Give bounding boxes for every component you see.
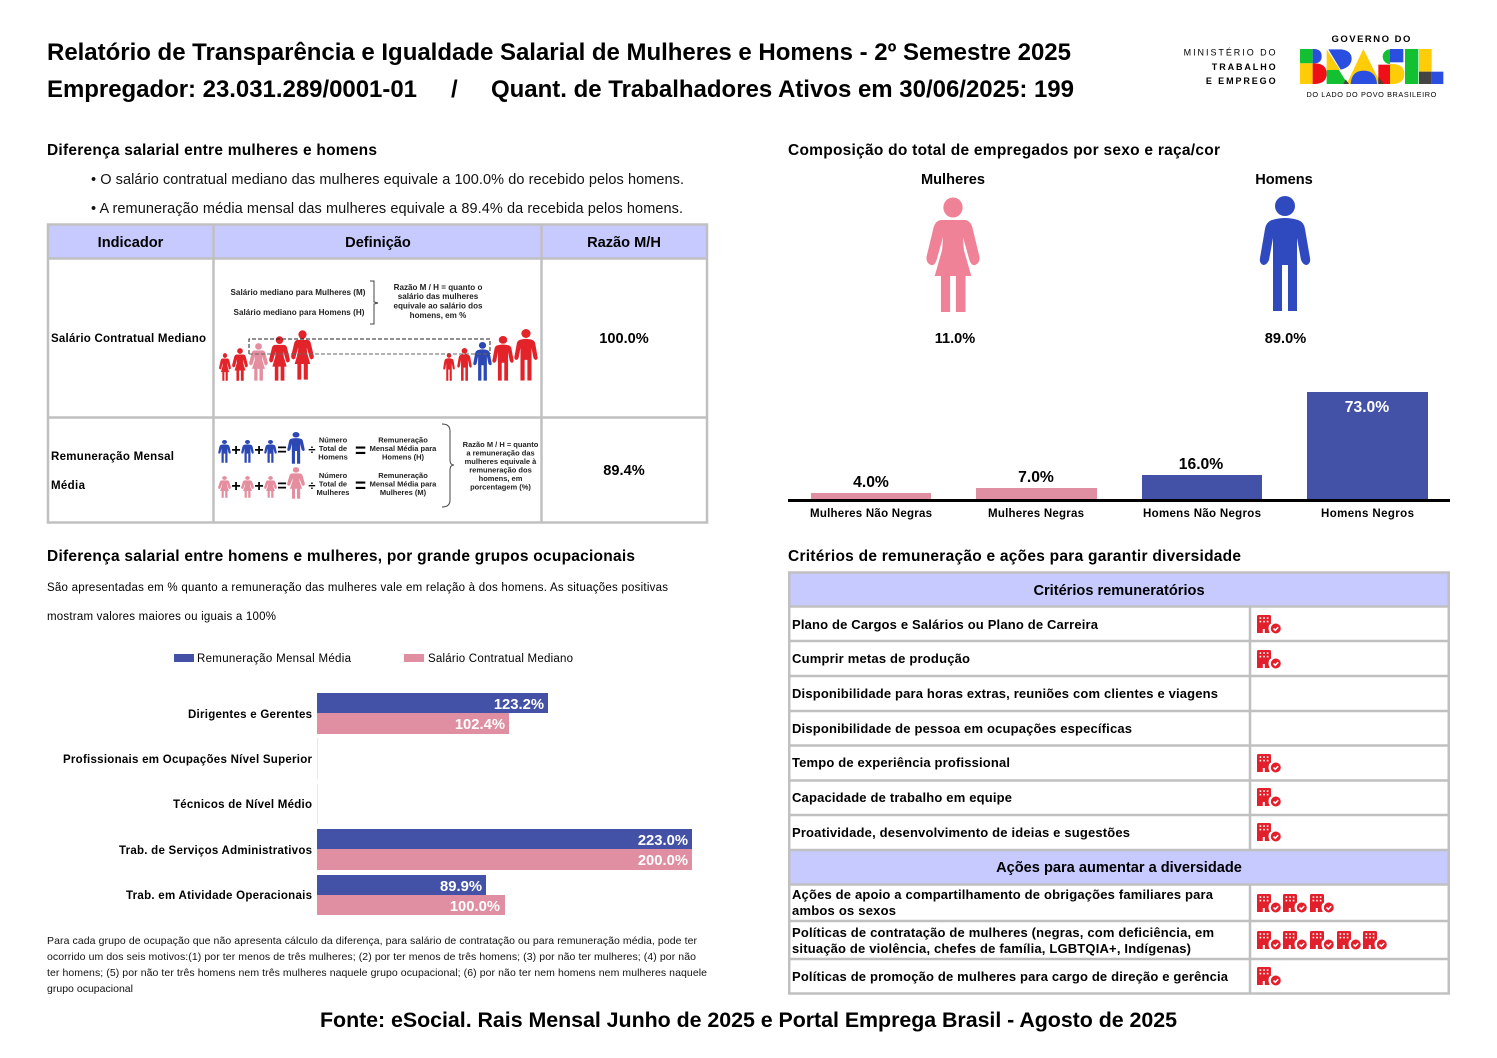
title (47, 39, 1074, 103)
diagram: remuneração média: homens, em (479, 474, 523, 483)
diagram: remuneração média: mulheres equivale à (465, 457, 537, 466)
diagram: remuneração média: = (277, 478, 287, 495)
heading: grupos ocupacionais: Diferença salarial entre homens e mulheres, por grande grupos ocupacionais (47, 548, 635, 565)
diagram: remuneração média: + (231, 442, 241, 459)
bars: atividade operacionais: 100.0% (450, 899, 500, 915)
table header: Definição (345, 235, 411, 251)
text block: footnote: Para cada grupo de ocupação que não apresenta cálculo da diferença, para salário de contratação ou para remuneração média, pode ter (47, 935, 698, 947)
bar chart: composição por raça/cor: 4.0% (853, 474, 889, 491)
diagram: remuneração média: Homens (H) (382, 452, 425, 462)
title: Relatório de Transparência e Igualdade Salarial de Mulheres e Homens - 2º Semestre 2025 (47, 39, 1071, 66)
row: salário contratual mediano: 100.0% (599, 331, 649, 347)
diagram: remuneração média: Mulheres (M) (380, 488, 427, 497)
bars: serviços administrativos: 223.0% (638, 833, 688, 849)
row labels: critérios: Tempo de experiência profissional (792, 755, 1010, 770)
logo: Ministério do Trabalho e Emprego: TRABALHO (1212, 62, 1278, 72)
bars: dirigentes: 102.4% (455, 717, 505, 733)
row labels: critérios: Cumprir metas de produção (792, 651, 970, 666)
icon: woman (926, 198, 980, 312)
bar chart: composição por raça/cor: Homens Negros (1321, 508, 1414, 520)
title: / (451, 76, 458, 103)
diagram: salário mediano: salário das mulheres (398, 292, 479, 301)
diagram: remuneração média: Homens (318, 452, 348, 462)
value: mulheres: 11.0% (935, 331, 975, 347)
label: homens: Homens (1255, 172, 1313, 188)
category labels: Trab. de Serviços Administrativos (119, 845, 312, 857)
bars: atividade operacionais (317, 875, 505, 915)
table header: Indicador (98, 235, 164, 251)
category labels: Técnicos de Nível Médio (173, 799, 312, 811)
text block: summary bullets: • O salário contratual mediano das mulheres equivale a 100.0% do recebido pelos homens. (91, 172, 684, 188)
diagram: remuneração média: Total de (319, 444, 347, 453)
row labels: critérios: Plano de Cargos e Salários ou Plano de Carreira (792, 617, 1099, 632)
diagram: remuneração média: remuneração dos (469, 466, 532, 474)
category labels (63, 709, 313, 902)
diagram: remuneração média: Número (319, 471, 348, 480)
text block: footnote: ter homens; (5) por não ter três homens nem três mulheres naquele grupo ocupacional; (6) por não ter nem homens nem mulheres naquele (47, 967, 707, 979)
diagram: remuneração média: Remuneração (378, 436, 428, 444)
bars: dirigentes (317, 693, 548, 734)
chart legend: Remuneração Mensal Média (197, 653, 352, 665)
diagram: remuneração média: + (254, 442, 264, 459)
diagram: salário mediano: Salário mediano para Mulheres (M) (230, 288, 366, 297)
panel: criteria table (789, 572, 1449, 994)
bar chart: composição por raça/cor: Homens Não Negros (1143, 508, 1261, 520)
text block: explanation (47, 582, 668, 623)
row labels: ações: situação de violência, chefes de família, LGBTQIA+, Indígenas) (792, 941, 1191, 956)
bars: serviços administrativos (317, 829, 692, 870)
table header (98, 235, 661, 251)
icons: critérios (1257, 615, 1281, 842)
panel: composição por sexo (921, 172, 1313, 347)
text block: explanation: São apresentadas em % quanto a remuneração das mulheres vale em relação à dos homens. As situações positivas (47, 582, 668, 594)
logo: Ministério do Trabalho e Emprego (1184, 48, 1278, 86)
row labels: critérios: Disponibilidade de pessoa em ocupações específicas (792, 721, 1132, 736)
row: remuneração mensal média: Média (51, 480, 86, 492)
row labels: critérios: Capacidade de trabalho em equipe (792, 790, 1012, 805)
logo: Governo do Brasil (1300, 34, 1443, 99)
diagram: remuneração média: ÷ (308, 442, 316, 457)
row: salário contratual mediano: Salário Contratual Mediano (51, 333, 206, 345)
table header: Razão M/H (587, 235, 661, 251)
value: homens: 89.0% (1265, 331, 1306, 347)
bars: serviços administrativos: 200.0% (638, 853, 688, 869)
row labels: ações: Políticas de promoção de mulheres para cargo de direção e gerência (792, 969, 1229, 984)
category labels: Dirigentes e Gerentes (188, 709, 312, 721)
diagram: remuneração média: Razão M / H = quanto (463, 440, 539, 449)
logo: Governo do Brasil: GOVERNO DO (1331, 34, 1412, 45)
text block: summary bullets (91, 172, 684, 217)
text block: explanation: mostram valores maiores ou iguais a 100% (47, 611, 276, 623)
diagram: remuneração média: Mensal Média para (370, 444, 437, 453)
bars: atividade operacionais: 89.9% (440, 879, 482, 895)
diagram: remuneração média: Mensal Média para (370, 480, 437, 488)
category labels: Profissionais em Ocupações Nível Superior (63, 754, 313, 766)
text block: footnote: grupo ocupacional (47, 983, 133, 995)
row: salário contratual mediano (51, 331, 649, 347)
diagram: remuneração média: Remuneração (378, 471, 428, 480)
bar chart: composição por raça/cor (788, 392, 1450, 520)
bar chart: composição por raça/cor: 16.0% (1179, 456, 1223, 473)
diagram: remuneração média: Número (319, 436, 348, 444)
logo: Ministério do Trabalho e Emprego: E EMPREGO (1206, 76, 1278, 86)
text block: footnote (47, 935, 707, 995)
row labels: critérios: Disponibilidade para horas extras, reuniões com clientes e viagens (792, 686, 1218, 701)
diagram: salário mediano (219, 281, 538, 381)
bar chart: grupos ocupacionais (63, 693, 692, 915)
row labels: ações: ambos os sexos (792, 903, 896, 918)
bar chart: composição por raça/cor: Mulheres Não Negras (810, 508, 932, 520)
section header: ações: Ações para aumentar a diversidade (996, 860, 1242, 876)
diagram: remuneração média: = (355, 441, 366, 462)
bars: dirigentes: 123.2% (494, 697, 544, 713)
diagram: remuneração média: a remuneração das (466, 448, 535, 458)
diagram: remuneração média: ÷ (308, 478, 316, 493)
chart legend (174, 653, 573, 665)
row labels: ações (792, 887, 1229, 984)
title: Quant. de Trabalhadores Ativos em 30/06/2025: 199 (491, 76, 1074, 103)
diagram: salário mediano: Razão M / H = quanto o (394, 283, 482, 292)
bar chart: composição por raça/cor: 73.0% (1345, 399, 1389, 416)
heading: diferença salarial: Diferença salarial entre mulheres e homens (47, 142, 377, 159)
logo: Ministério do Trabalho e Emprego: MINISTÉRIO DO (1184, 48, 1278, 58)
icons: ações (1257, 894, 1387, 986)
diagram: salário mediano: homens, em % (410, 311, 466, 320)
diagram: salário mediano: equivale ao salário dos (393, 302, 483, 310)
title: Empregador: 23.031.289/0001-01 (47, 76, 417, 103)
diagram: remuneração média: Total de (319, 480, 347, 488)
diagram: remuneração média: + (231, 478, 241, 495)
row labels: critérios (792, 617, 1218, 840)
row: remuneração mensal média (51, 451, 645, 492)
text block: summary bullets: • A remuneração média mensal das mulheres equivale a 89.4% da recebida pelos homens. (91, 201, 683, 217)
footer source: Fonte: eSocial. Rais Mensal Junho de 2025 e Portal Emprega Brasil - Agosto de 2025 (320, 1008, 1177, 1032)
panel: indicator table (48, 224, 707, 523)
diagram: remuneração média: = (355, 476, 366, 497)
row labels: ações: Políticas de contratação de mulheres (negras, com deficiência, em (792, 925, 1214, 940)
category labels: Trab. em Atividade Operacionais (126, 890, 312, 902)
text block: footnote: ocorrido um dos seis motivos:(1) por ter menos de três mulheres; (2) por ter menos de três homens; (3) por não ter mulheres; (4) por não (47, 951, 696, 963)
logo: Governo do Brasil: DO LADO DO POVO BRASILEIRO (1307, 90, 1437, 99)
diagram: salário mediano: Salário mediano para Homens (H) (234, 308, 365, 317)
row labels: critérios: Proatividade, desenvolvimento de ideias e sugestões (792, 825, 1130, 840)
diagram: remuneração média: Mulheres (317, 488, 349, 497)
bar chart: composição por raça/cor: 7.0% (1018, 469, 1054, 486)
section header: critérios remuneratórios: Critérios remuneratórios (1033, 583, 1205, 599)
diagram: remuneração média: porcentagem (%) (470, 482, 531, 492)
row labels: ações: Ações de apoio a compartilhamento de obrigações familiares para (792, 887, 1214, 902)
heading: critérios: Critérios de remuneração e ações para garantir diversidade (788, 548, 1241, 565)
heading: composição: Composição do total de empregados por sexo e raça/cor (788, 142, 1220, 159)
icon: man (1260, 196, 1310, 311)
diagram: remuneração média (218, 424, 539, 507)
label: mulheres: Mulheres (921, 172, 985, 188)
bar chart: composição por raça/cor: Mulheres Negras (988, 508, 1084, 520)
chart legend: Salário Contratual Mediano (428, 653, 573, 665)
row: remuneração mensal média: 89.4% (603, 463, 645, 479)
diagram: remuneração média: + (254, 478, 264, 495)
row: remuneração mensal média: Remuneração Mensal (51, 451, 174, 463)
diagram: remuneração média: = (277, 442, 287, 459)
